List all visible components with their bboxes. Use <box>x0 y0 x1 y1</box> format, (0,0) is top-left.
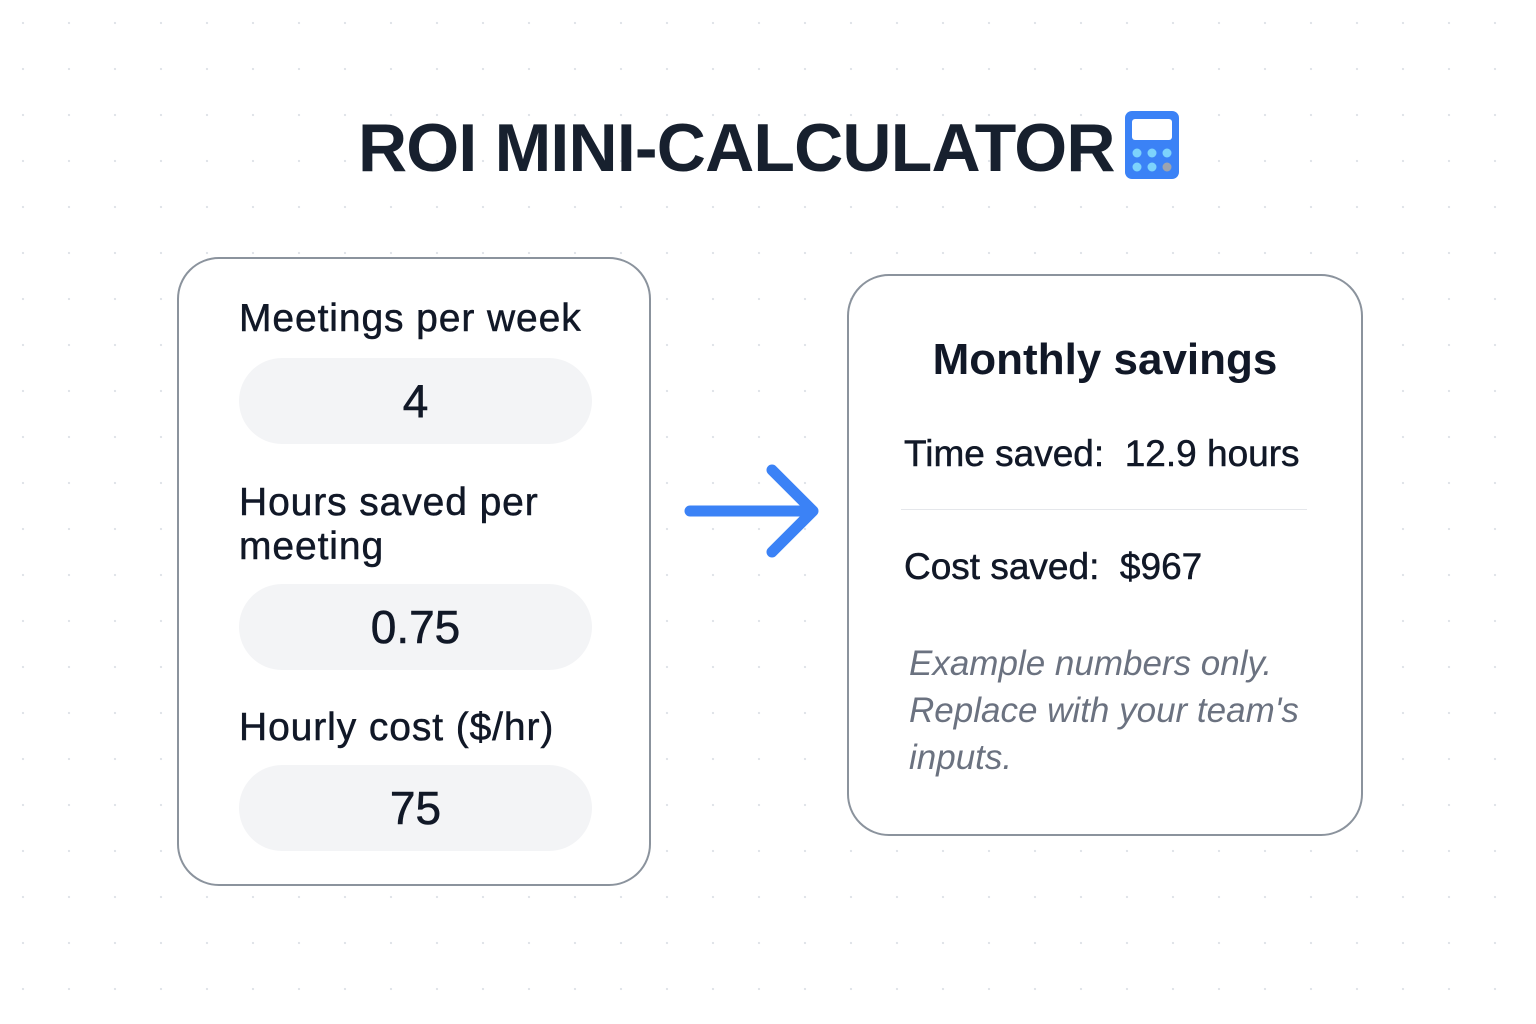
panel: monthly savings <box>847 274 1363 836</box>
label: meetings per week: Meetings per week <box>239 297 582 340</box>
input: 75 <box>239 765 592 851</box>
label: hourly cost: Hourly cost ($/hr) <box>239 706 554 749</box>
input: 4 <box>239 358 592 444</box>
input: 4: 4 <box>403 375 428 427</box>
label: hours saved per meeting: meeting <box>239 525 384 568</box>
cost saved: Cost saved: $967 <box>904 546 1202 587</box>
panel: inputs <box>177 257 651 886</box>
input: 75: 75 <box>390 782 441 834</box>
label: hours saved per meeting: Hours saved per <box>239 481 539 524</box>
arrow <box>684 464 818 558</box>
heading: Monthly savings <box>933 335 1277 384</box>
time saved: Time saved: 12.9 hours <box>904 433 1300 474</box>
input: 0.75: 0.75 <box>371 601 460 653</box>
input: 0.75 <box>239 584 592 670</box>
label: hours saved per meeting <box>239 481 539 568</box>
note: Example numbers only. Replace with your team's inputs. <box>909 644 1299 777</box>
title: ROI MINI-CALCULATOR <box>358 110 1115 186</box>
